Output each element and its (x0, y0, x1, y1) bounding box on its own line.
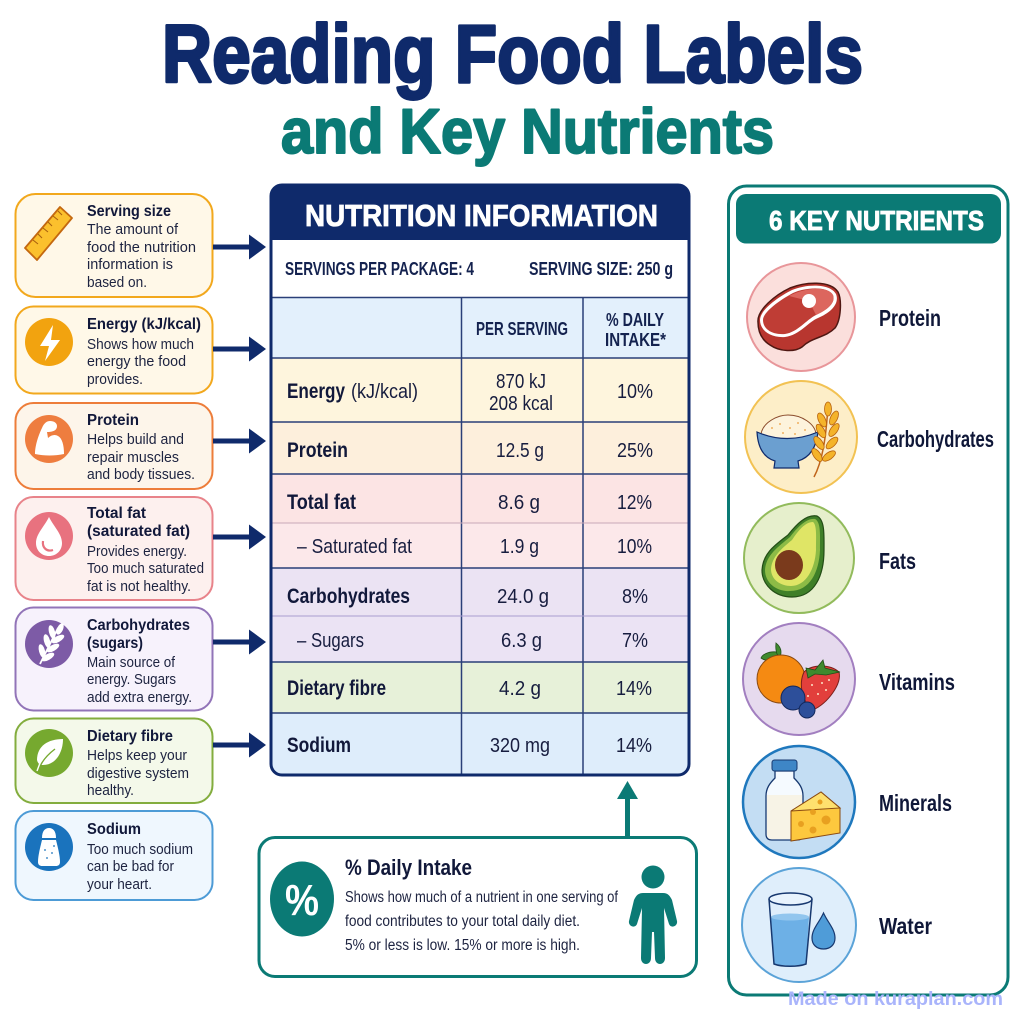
panel: % daily intake (259, 838, 696, 976)
callout: carbohydrates: Carbohydrates (87, 617, 190, 634)
callout: energy: energy the food (87, 354, 186, 370)
arrows: callouts to table (213, 234, 266, 758)
nutrient: vitamins: Vitamins (879, 669, 955, 695)
icon: leaf (25, 729, 73, 777)
callout: serving size: Serving size (87, 203, 171, 220)
panel: 6 key nutrients (728, 186, 1008, 995)
row: energy: 870 kJ (496, 370, 546, 393)
icon: fat drop (25, 512, 73, 560)
row: saturated fat: 10% (617, 535, 652, 558)
table outer border (271, 185, 689, 775)
panel: % daily intake: 5% or less is low. 15% or more is high. (345, 937, 580, 954)
callout: carbohydrates (16, 608, 212, 710)
heading (736, 194, 1001, 244)
row: dietary fibre: Dietary fibre (287, 677, 386, 700)
callout: protein: repair muscles (87, 450, 179, 466)
callout: sodium: can be bad for (87, 859, 174, 875)
row: carbohydrates: Carbohydrates (287, 585, 410, 608)
callout: total fat: fat is not healthy. (87, 579, 191, 595)
callout: protein: Helps build and (87, 432, 184, 448)
callout: dietary fibre: digestive system (87, 766, 189, 782)
callout: sodium: your heart. (87, 877, 152, 893)
callout: protein: and body tissues. (87, 467, 195, 483)
callout: serving size: The amount of (87, 222, 179, 238)
icon: fruit (757, 643, 840, 718)
row: sugars (297, 629, 648, 652)
table row backgrounds (271, 240, 689, 775)
servings row: SERVING SIZE: 250 g (529, 259, 673, 279)
callout: serving size: food the nutrition (87, 240, 196, 256)
table header (270, 184, 690, 240)
nutrient: protein: Protein (879, 305, 941, 331)
nutrient: water (742, 868, 932, 982)
row: carbohydrates: 8% (622, 585, 648, 608)
row: saturated fat (297, 535, 652, 558)
arrow: daily intake to table (617, 781, 638, 837)
icon: ruler (25, 207, 72, 260)
nutrient: minerals: Minerals (879, 790, 952, 816)
nutrient: carbohydrates (745, 381, 994, 493)
title: Reading Food Labels (162, 9, 863, 100)
callout: serving size: information is (87, 257, 173, 273)
column headings: PER SERVING (476, 319, 568, 339)
callout: protein: Protein (87, 412, 139, 429)
callout: carbohydrates: add extra energy. (87, 690, 192, 706)
row: sugars: 6.3 g (501, 629, 542, 652)
callout: serving size: based on. (87, 275, 147, 291)
icon: steak (758, 283, 840, 351)
row: sodium: 320 mg (490, 734, 550, 757)
callout: energy (16, 306, 212, 394)
row: sugars: – Sugars (297, 629, 364, 652)
row: carbohydrates: 24.0 g (497, 585, 549, 608)
row: dietary fibre: 4.2 g (499, 677, 541, 700)
row: energy: (kJ/kcal) (351, 380, 418, 403)
title (162, 9, 863, 167)
nutrient: protein (747, 263, 941, 371)
icon: person (629, 866, 677, 964)
callout: protein (16, 403, 212, 489)
callout: total fat: Provides energy. (87, 544, 187, 560)
servings row (285, 259, 673, 279)
row: energy: 10% (617, 380, 653, 403)
row: sodium: 14% (616, 734, 652, 757)
callout: sodium: Too much sodium (87, 842, 193, 858)
icon: avocado (762, 516, 824, 597)
column headings: % DAILY (606, 310, 664, 330)
row: carbohydrates (287, 585, 648, 608)
icon: lightning (25, 318, 73, 366)
table grid lines (271, 298, 689, 775)
row: energy: 208 kcal (489, 392, 553, 415)
watermark: Made on kuraplan.com (788, 989, 1003, 1010)
icon: salt shaker (25, 823, 73, 871)
callout: carbohydrates: energy. Sugars (87, 672, 176, 688)
nutrient: minerals (743, 746, 952, 858)
row: sodium (287, 734, 652, 757)
row: protein: 12.5 g (496, 439, 544, 462)
row: energy (287, 370, 653, 415)
row: total fat: Total fat (287, 491, 356, 514)
nutrient: water: Water (879, 913, 932, 939)
callout: total fat: Too much saturated (87, 561, 204, 577)
panel: % daily intake: Shows how much of a nutrient in one serving of (345, 889, 619, 906)
row: total fat: 12% (617, 491, 652, 514)
row: protein: 25% (617, 439, 653, 462)
callout: dietary fibre (16, 718, 212, 803)
callout: carbohydrates: (sugars) (87, 635, 143, 652)
icon: percent (270, 862, 334, 936)
row: dietary fibre: 14% (616, 677, 652, 700)
callout: total fat: (saturated fat) (87, 523, 190, 540)
callout: dietary fibre: healthy. (87, 783, 134, 799)
callout: carbohydrates: Main source of (87, 655, 176, 671)
callout: dietary fibre: Helps keep your (87, 748, 187, 764)
nutrient: fats: Fats (879, 548, 916, 574)
panel: % daily intake: food contributes to your total daily diet. (345, 913, 580, 930)
panel: callouts (16, 194, 212, 900)
row: energy: Energy (287, 380, 345, 403)
column headings: INTAKE* (605, 330, 666, 350)
row: sugars: 7% (622, 629, 648, 652)
icon: wheat (25, 620, 73, 668)
icon: muscle (25, 415, 73, 463)
table header: NUTRITION INFORMATION (305, 198, 658, 233)
row: total fat (287, 491, 652, 514)
icon: milk and cheese (766, 760, 840, 841)
callout: sodium: Sodium (87, 821, 141, 838)
callout: total fat (16, 497, 212, 600)
callout: dietary fibre: Dietary fibre (87, 728, 173, 745)
row: dietary fibre (287, 677, 652, 700)
column headings (476, 310, 666, 350)
callout: energy: Shows how much (87, 337, 194, 353)
callout: energy: provides. (87, 372, 143, 388)
servings row: SERVINGS PER PACKAGE: 4 (285, 259, 474, 279)
icon: rice bowl and wheat (757, 402, 841, 477)
panel: nutrition information table (270, 184, 690, 775)
panel: % daily intake: % Daily Intake (345, 855, 472, 880)
callout: energy: Energy (kJ/kcal) (87, 316, 201, 333)
row: total fat: 8.6 g (498, 491, 540, 514)
heading: 6 KEY NUTRIENTS (769, 205, 984, 236)
callout: serving size (16, 194, 212, 297)
row: sodium: Sodium (287, 734, 351, 757)
nutrient: vitamins (743, 623, 955, 735)
icon: glass and drop (769, 893, 835, 966)
row: saturated fat: 1.9 g (500, 535, 539, 558)
row: saturated fat: – Saturated fat (297, 535, 412, 558)
row: protein: Protein (287, 439, 348, 462)
icon: percent: % (285, 876, 319, 925)
row: protein (287, 439, 653, 462)
callout: sodium (16, 811, 212, 900)
nutrient: fats (744, 503, 916, 613)
title: and Key Nutrients (281, 97, 774, 167)
callout: total fat: Total fat (87, 505, 147, 522)
